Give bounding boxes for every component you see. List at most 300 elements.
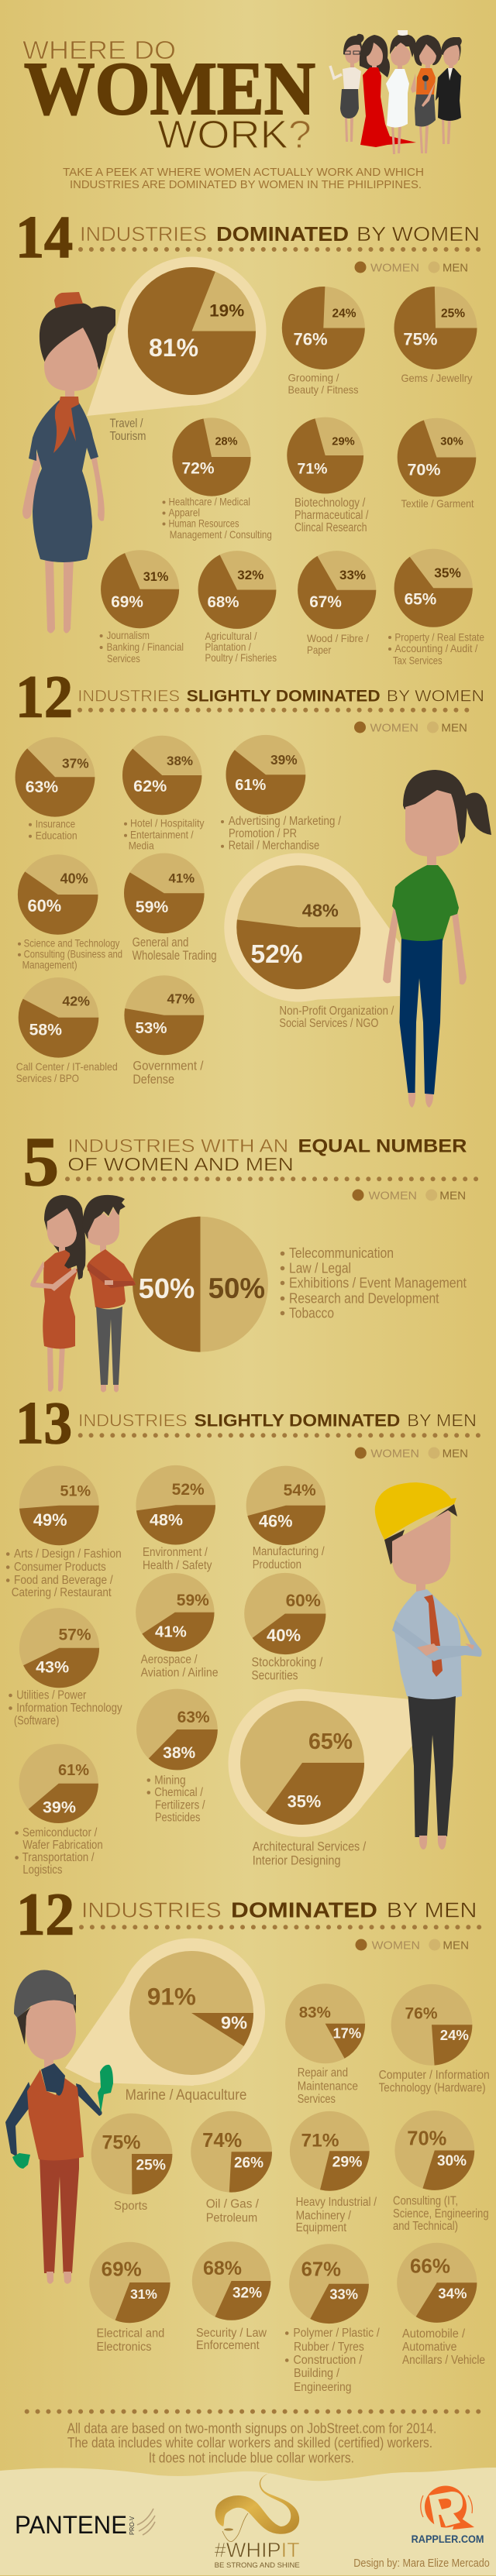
- pie: Security 32/68: 68%: [203, 2258, 242, 2279]
- label: Healthcare list: Management / Consulting: [170, 528, 272, 541]
- pie: Marine 9/91: [118, 1938, 265, 2085]
- pie: Journalism 69/31: [101, 550, 179, 628]
- label: Consulting: and Technical): [393, 2220, 458, 2233]
- label: Travel / Tourism: Travel /: [110, 417, 143, 431]
- pie: Computer hardware 24/76: [391, 1984, 472, 2066]
- pie: Security 32/68: 32%: [232, 2285, 262, 2302]
- figure: woman in green shirt: [383, 770, 491, 1108]
- pie: Arts 49/51: 51%: [60, 1483, 91, 1500]
- label: General: Wholesale Trading: [133, 948, 217, 963]
- heading: BY WOMEN: [356, 222, 480, 246]
- illustration: five working women: [330, 30, 462, 154]
- label: Hotel list: [124, 817, 205, 852]
- pie: Polymer 33/67: 33%: [329, 2286, 358, 2302]
- legend: [354, 722, 467, 734]
- pie: Property 65/35: 35%: [434, 565, 461, 580]
- label: Journalism list: Banking / Financial: [107, 641, 184, 653]
- label: Environment: Health / Safety: [143, 1559, 212, 1572]
- pie: Journalism 69/31: 31%: [143, 570, 169, 584]
- label: equal industries list: Tobacco: [289, 1305, 334, 1321]
- pie: General 59/41: 41%: [169, 871, 195, 886]
- label: Semiconductor list: [15, 1826, 103, 1877]
- label: Polymer list: Polymer / Plastic /: [293, 2327, 380, 2340]
- legend: WOMEN: [370, 262, 419, 274]
- pie: Repair 17/83: 17%: [333, 2025, 361, 2042]
- pie: Healthcare 72/28: 72%: [181, 460, 215, 477]
- callout: speech beam: [87, 304, 196, 416]
- label: Polymer list: Construction /: [293, 2354, 363, 2367]
- label: equal industries list: [281, 1245, 467, 1321]
- pie: General 59/41: 59%: [136, 898, 168, 916]
- pie: Travel 81/19: 19%: [209, 301, 244, 321]
- pie: Textile 70/30: 30%: [440, 436, 463, 448]
- label: Advertising list: Promotion / PR: [229, 827, 297, 840]
- nurse in white: [386, 30, 416, 154]
- label: Journalism list: Services: [107, 652, 140, 665]
- pie: Healthcare 72/28: [172, 417, 251, 496]
- footnote: [67, 2420, 436, 2465]
- title: WORK?: [157, 112, 312, 156]
- label: equal industries list: Exhibitions / Event Management: [289, 1275, 467, 1290]
- pie: Government 53/47: 47%: [167, 991, 195, 1006]
- pie: Call Center 58/42: [19, 977, 98, 1058]
- pie: Hotel 62/38: [122, 736, 202, 815]
- pie: Environment 48/52: 52%: [172, 1481, 205, 1499]
- pie: Semiconductor 39/61: 39%: [43, 1798, 76, 1816]
- pie: Architectural 35/65: 35%: [288, 1792, 321, 1811]
- intro text: INDUSTRIES ARE DOMINATED BY WOMEN IN THE PHILIPPINES.: [70, 178, 422, 191]
- label: Insurance list: Insurance: [36, 818, 75, 830]
- legend: [355, 1939, 469, 1952]
- label: Biotechnology: Pharmaceutical /: [294, 509, 369, 522]
- label: Repair: Services: [298, 2093, 336, 2106]
- label: Security: Enforcement: [196, 2339, 260, 2352]
- pie: Agricultural 68/32: 32%: [237, 568, 264, 582]
- label: Mining list: Fertilizers /: [155, 1799, 205, 1812]
- reporter in orange: [411, 35, 442, 153]
- label: Government: Government /: [133, 1058, 204, 1073]
- label: Hotel list: Entertainment /: [130, 829, 194, 841]
- label: Repair: [298, 2066, 358, 2106]
- pie: General 59/41: [124, 854, 205, 933]
- pie: Grooming 76/24: [282, 287, 365, 369]
- pie: Insurance 63/37: 63%: [26, 778, 58, 796]
- label: Mining list: [147, 1774, 205, 1825]
- figure: worker in vest with green gloves: [5, 1970, 113, 2284]
- label: Automobile: Ancillars / Vehicle: [402, 2354, 485, 2367]
- pie: Travel 81/19: [118, 257, 267, 406]
- pie: Insurance 63/37: [16, 737, 95, 817]
- label: Science list: Science and Technology: [24, 937, 119, 950]
- heading: INDUSTRIES: [78, 1411, 188, 1431]
- pie: Oil 26/74: [191, 2111, 272, 2193]
- label: Manufacturing: Production: [253, 1558, 301, 1571]
- footnote: It does not include blue collar workers.: [149, 2450, 354, 2465]
- heading: INDUSTRIES: [78, 688, 180, 706]
- pie: Government 53/47: [124, 975, 204, 1055]
- label: Insurance list: [29, 818, 78, 842]
- label: Non-Profit: Non-Profit Organization /: [279, 1005, 394, 1018]
- pie: Oil 26/74: 26%: [234, 2155, 264, 2172]
- pie: Travel 81/19: 81%: [149, 334, 198, 362]
- label: Security: Security / Law: [196, 2327, 267, 2340]
- legend: WOMEN: [370, 722, 418, 734]
- label: Government: Defense: [133, 1072, 174, 1087]
- label: Agricultural: Agricultural /: [205, 630, 257, 642]
- legend: WOMEN: [372, 1939, 420, 1952]
- pie: Mining 38/63: 38%: [163, 1744, 196, 1762]
- label: Architectural: Interior Designing: [253, 1853, 341, 1867]
- pie: Sports 25/75: 75%: [102, 2132, 141, 2154]
- label: Call Center: Services / BPO: [16, 1072, 79, 1084]
- woman in black suit: [436, 37, 462, 144]
- label: Gems: Gems / Jewellry: [401, 372, 473, 384]
- pie: Hotel 62/38: 62%: [133, 777, 167, 795]
- pie: Aerospace 41/59: 59%: [177, 1592, 209, 1609]
- pie: Electrical 31/69: 31%: [130, 2286, 157, 2302]
- logo: #WHIPIT: #WHIPIT: [215, 2539, 300, 2562]
- pie: Manufacturing 46/54: 54%: [284, 1482, 316, 1499]
- label: Arts list: Catering / Restaurant: [12, 1586, 112, 1599]
- label: equal industries list: Law / Legal: [289, 1260, 351, 1276]
- legend: [355, 1447, 468, 1461]
- pie: Non-Profit 52/48: [224, 854, 373, 1002]
- label: Architectural: Architectural Services /: [253, 1839, 366, 1853]
- woman: [30, 1195, 85, 1392]
- label: Polymer list: Engineering: [294, 2381, 352, 2394]
- pie: Semiconductor 39/61: 61%: [58, 1762, 89, 1779]
- pie: Gems 75/25: 25%: [441, 307, 465, 321]
- label: Manufacturing: [253, 1545, 325, 1571]
- legend: MEN: [439, 1190, 466, 1202]
- label: Consulting: [393, 2195, 489, 2233]
- pie: Grooming 76/24: 24%: [332, 307, 356, 321]
- label: Biotechnology: Clincal Research: [294, 521, 367, 534]
- figure: flight attendant: [22, 292, 115, 634]
- label: Polymer list: [285, 2327, 380, 2394]
- pie: Environment 48/52: 48%: [150, 1511, 183, 1530]
- woman in red gown: [360, 35, 416, 147]
- label: Environment: Environment /: [143, 1546, 208, 1559]
- heading: INDUSTRIES: [80, 222, 207, 246]
- pie: Arts 49/51: [19, 1465, 99, 1545]
- label: Utilities list: Information Technology: [16, 1702, 122, 1715]
- pie: Utilities 43/57: 43%: [36, 1657, 69, 1676]
- pie: Grooming 76/24: 76%: [293, 330, 328, 349]
- label: Grooming: Beauty / Fitness: [288, 383, 358, 396]
- heading: [22, 1124, 477, 1200]
- pie: Oil 26/74: 74%: [202, 2130, 242, 2152]
- heading: BY WOMEN: [387, 688, 484, 706]
- label: Stockbroking: Securities: [251, 1668, 298, 1682]
- pie: equal 50/50: [133, 1217, 268, 1352]
- pie: Wood 67/33: [298, 551, 376, 629]
- pie: Advertising 61/39: [226, 735, 305, 815]
- label: Heavy Industrial: Equipment: [296, 2221, 347, 2234]
- label: Healthcare list: Healthcare / Medical: [169, 496, 250, 508]
- label: Wood: Paper: [307, 644, 332, 656]
- label: Travel / Tourism: Tourism: [110, 430, 146, 443]
- pie: Healthcare 72/28: 28%: [215, 436, 238, 448]
- title: [22, 36, 315, 156]
- heading: 13: [16, 1389, 72, 1456]
- label: Electrical: [96, 2327, 164, 2354]
- label: Arts list: Food and Beverage /: [14, 1574, 113, 1587]
- label: Journalism list: [100, 629, 184, 665]
- label: Arts list: Arts / Design / Fashion: [14, 1547, 122, 1561]
- heading: INDUSTRIES: [81, 1898, 222, 1922]
- pie: Consulting 30/70: [394, 2111, 474, 2190]
- heading: BY MEN: [387, 1898, 477, 1922]
- label: General: [133, 935, 217, 963]
- label: Architectural: [253, 1839, 366, 1867]
- label: Grooming: Grooming /: [288, 372, 339, 384]
- label: Heavy Industrial: [296, 2196, 377, 2234]
- pie: equal 50/50: 50%: [139, 1273, 195, 1304]
- pie: Automobile 34/66: [397, 2243, 477, 2323]
- label: Arts list: Consumer Products: [14, 1561, 106, 1574]
- label: Repair: Repair and: [298, 2066, 348, 2080]
- label: General: General and: [133, 935, 188, 950]
- label: Arts list: [6, 1547, 122, 1599]
- intro text: [63, 166, 424, 191]
- label: Semiconductor list: Wafer Fabrication: [22, 1839, 103, 1852]
- label: Semiconductor list: Logistics: [22, 1863, 63, 1877]
- label: Utilities list: (Software): [14, 1715, 59, 1728]
- pie: Biotechnology 71/29: 71%: [297, 461, 328, 478]
- label: Aerospace: Aviation / Airline: [141, 1667, 219, 1680]
- heading: INDUSTRIES WITH AN: [67, 1135, 288, 1156]
- pie: Environment 48/52: [136, 1465, 215, 1544]
- label: Insurance list: Education: [36, 829, 78, 842]
- pie: equal 50/50: 50%: [208, 1273, 265, 1304]
- pie: Automobile 34/66: 34%: [438, 2285, 467, 2302]
- label: Advertising list: Retail / Merchandise: [229, 840, 319, 853]
- label: Security: [196, 2327, 267, 2352]
- label: Electrical: Electrical and: [96, 2327, 164, 2341]
- heading: DOMINATED: [216, 222, 349, 246]
- pie: Heavy Industrial 29/71: [290, 2111, 370, 2191]
- label: Marine: Marine / Aquaculture: [126, 2087, 246, 2104]
- label: Science list: Consulting (Business and: [24, 948, 122, 960]
- pie: Textile 70/30: [398, 418, 476, 496]
- intro text: TAKE A PEEK AT WHERE WOMEN ACTUALLY WORK AND WHICH: [63, 166, 424, 179]
- footnote: The data includes white collar workers and skilled (certified) workers.: [67, 2435, 432, 2451]
- label: Electrical: Electronics: [96, 2341, 152, 2354]
- label: Advertising list: Advertising / Marketing /: [229, 815, 342, 828]
- pie: Wood 67/33: 67%: [309, 593, 342, 611]
- label: Repair: Maintenance: [298, 2080, 358, 2093]
- heading: [16, 1389, 479, 1456]
- title: WOMEN: [24, 47, 315, 130]
- label: Semiconductor list: Transportation /: [22, 1851, 95, 1864]
- panel: 14 industries dominated by women: [16, 204, 484, 666]
- pie: Manufacturing 46/54: [246, 1466, 326, 1545]
- label: Advertising list: [221, 815, 342, 853]
- pie: Heavy Industrial 29/71: 71%: [301, 2130, 339, 2152]
- label: Science list: [18, 937, 122, 971]
- pie: Heavy Industrial 29/71: 29%: [332, 2153, 362, 2170]
- label: Non-Profit: Social Services / NGO: [279, 1017, 378, 1030]
- heading: 12: [16, 1881, 74, 1948]
- label: Environment: [143, 1546, 212, 1572]
- label: Textile: Textile / Garment: [401, 497, 474, 510]
- pie: Journalism 69/31: 69%: [111, 593, 143, 611]
- pie: Consulting 30/70: 30%: [437, 2153, 467, 2169]
- pie: Utilities 43/57: [19, 1608, 99, 1688]
- pie: Property 65/35: [394, 549, 473, 627]
- label: Travel / Tourism: [110, 417, 146, 443]
- footnote: All data are based on two-month signups on JobStreet.com for 2014.: [67, 2420, 436, 2436]
- label: Biotechnology: [294, 496, 369, 534]
- pie: Gems 75/25: 75%: [403, 330, 437, 349]
- label: Consulting: Consulting (IT,: [393, 2195, 458, 2207]
- legend: MEN: [443, 1447, 468, 1461]
- label: Agricultural: Poultry / Fisheries: [205, 651, 277, 664]
- label: Polymer list: Building /: [294, 2367, 340, 2380]
- label: Call Center: Call Center / IT-enabled: [16, 1060, 118, 1073]
- title: WHERE DO: [22, 36, 176, 64]
- pie: Architectural 35/65: [228, 1689, 377, 1837]
- pie: Computer hardware 24/76: 76%: [405, 2004, 438, 2023]
- figure: man in hard hat: [375, 1482, 482, 1850]
- label: Utilities list: [9, 1688, 122, 1728]
- label: Wood: Wood / Fibre /: [307, 632, 369, 644]
- legend: [352, 1190, 466, 1202]
- legend: WOMEN: [370, 1447, 419, 1461]
- label: Automobile: Automative: [402, 2341, 456, 2354]
- label: Call Center: [16, 1060, 118, 1084]
- label: Hotel list: Media: [129, 840, 154, 852]
- legend: MEN: [443, 262, 468, 274]
- pie: Insurance 63/37: 37%: [62, 756, 89, 771]
- label: Mining list: Pesticides: [155, 1812, 201, 1825]
- pie: Stockbroking 40/60: 60%: [286, 1591, 321, 1610]
- label: Property list: Accounting / Audit /: [394, 642, 477, 654]
- pie: Government 53/47: 53%: [135, 1019, 167, 1037]
- label: Hotel list: Hotel / Hospitality: [130, 817, 205, 829]
- heading: 5: [22, 1124, 59, 1200]
- panel: 13 industries slightly dominated by men: [6, 1389, 482, 1877]
- label: Polymer list: Rubber / Tyres: [294, 2341, 364, 2354]
- pie: Polymer 33/67: [289, 2244, 369, 2324]
- label: Science list: Management): [22, 959, 78, 971]
- label: Government: [133, 1058, 204, 1087]
- pie: Science and Technology 60/40: 40%: [60, 871, 88, 886]
- label: Oil: [206, 2198, 260, 2224]
- label: Utilities list: Utilities / Power: [16, 1688, 86, 1702]
- pie: Repair 17/83: 83%: [299, 2004, 331, 2021]
- logo: Pantene Pro-V: PANTENE: [15, 2511, 127, 2539]
- pie: Biotechnology 71/29: [287, 417, 363, 493]
- label: Healthcare list: Human Resources: [169, 517, 239, 530]
- label: Wood: [307, 632, 369, 656]
- footer band: [0, 2468, 496, 2576]
- pie: Sports 25/75: 25%: [136, 2158, 166, 2173]
- pie: Aerospace 41/59: [136, 1573, 214, 1651]
- pie: Marine 9/91: 9%: [221, 2013, 247, 2033]
- label: Property list: Tax Services: [393, 654, 443, 666]
- pie: Agricultural 68/32: 68%: [207, 593, 239, 611]
- heading: [16, 204, 480, 270]
- heading: DOMINATED: [231, 1898, 377, 1922]
- logo: Rappler: [412, 2486, 484, 2545]
- label: Journalism list: Journalism: [107, 629, 150, 641]
- logo: Pantene Pro-V: PRO-V: [128, 2516, 136, 2535]
- panel: 12 industries slightly dominated by women: [16, 664, 491, 1108]
- pie: Repair 17/83: [285, 1984, 365, 2063]
- label: Non-Profit: [279, 1005, 394, 1030]
- heading: EQUAL NUMBER: [298, 1135, 467, 1156]
- legend: MEN: [441, 722, 467, 734]
- pie: Architectural 35/65: 65%: [308, 1729, 353, 1754]
- label: Semiconductor list: Semiconductor /: [22, 1826, 98, 1839]
- logo: #WHIPIT: BE STRONG AND SHINE: [215, 2561, 300, 2569]
- heading: [16, 1881, 480, 1948]
- heading: SLIGHTLY DOMINATED: [187, 688, 381, 706]
- label: Heavy Industrial: Machinery /: [296, 2209, 352, 2222]
- pie: Agricultural 68/32: [198, 551, 276, 629]
- pie: Non-Profit 52/48: 48%: [302, 901, 339, 921]
- label: Stockbroking: Stockbroking /: [251, 1655, 323, 1670]
- pie: Science and Technology 60/40: 60%: [27, 896, 61, 915]
- pie: Security 32/68: [192, 2241, 270, 2320]
- pie: Sports 25/75: [91, 2114, 172, 2194]
- logo: Rappler: RAPPLER.COM: [412, 2533, 484, 2545]
- label: Biotechnology: Biotechnology /: [294, 496, 366, 510]
- pie: Stockbroking 40/60: 40%: [267, 1626, 301, 1645]
- label: equal industries list: Telecommunication: [289, 1245, 394, 1261]
- pie: Semiconductor 39/61: [19, 1744, 98, 1823]
- label: Automobile: [402, 2327, 485, 2367]
- heading: [16, 664, 484, 730]
- legend: WOMEN: [369, 1190, 417, 1202]
- logo: #WHIPIT: [215, 2473, 300, 2569]
- pie: Automobile 34/66: 66%: [410, 2254, 450, 2277]
- pie: Science and Technology 60/40: [18, 854, 98, 935]
- pie: Electrical 31/69: [89, 2242, 170, 2323]
- callout: speech beam: [310, 880, 400, 1000]
- label: equal industries list: Research and Development: [289, 1290, 439, 1306]
- label: Aerospace: [141, 1654, 219, 1680]
- pie: Utilities 43/57: 57%: [58, 1626, 91, 1643]
- pie: Consulting 30/70: 70%: [407, 2128, 446, 2150]
- heading: SLIGHTLY DOMINATED: [195, 1411, 400, 1431]
- woman with glasses: [330, 34, 364, 142]
- label: Property list: [388, 630, 484, 666]
- pie: Hotel 62/38: 38%: [167, 754, 193, 768]
- pie: Computer hardware 24/76: 24%: [440, 2027, 469, 2043]
- pie: Property 65/35: 65%: [405, 590, 436, 609]
- panel: 12 industries dominated by men: [5, 1881, 490, 2394]
- heading: 14: [16, 204, 73, 270]
- pie: Aerospace 41/59: 41%: [155, 1623, 187, 1640]
- pie: Gems 75/25: [394, 287, 477, 369]
- pie: Mining 38/63: 63%: [177, 1709, 210, 1726]
- label: Computer hardware: [379, 2069, 490, 2095]
- pie: Call Center 58/42: 42%: [62, 993, 90, 1008]
- pie: Mining 38/63: [136, 1689, 218, 1770]
- pie: Manufacturing 46/54: 46%: [259, 1512, 293, 1530]
- label: Agricultural: [205, 630, 277, 664]
- label: Agricultural: Plantation /: [205, 641, 251, 653]
- pie: Marine 9/91: 91%: [147, 1982, 196, 2010]
- label: Mining list: Chemical /: [154, 1786, 204, 1799]
- pie: Arts 49/51: 49%: [33, 1510, 67, 1530]
- man: [83, 1195, 136, 1393]
- label: Stockbroking: [251, 1655, 323, 1682]
- pie: Polymer 33/67: 67%: [301, 2258, 341, 2280]
